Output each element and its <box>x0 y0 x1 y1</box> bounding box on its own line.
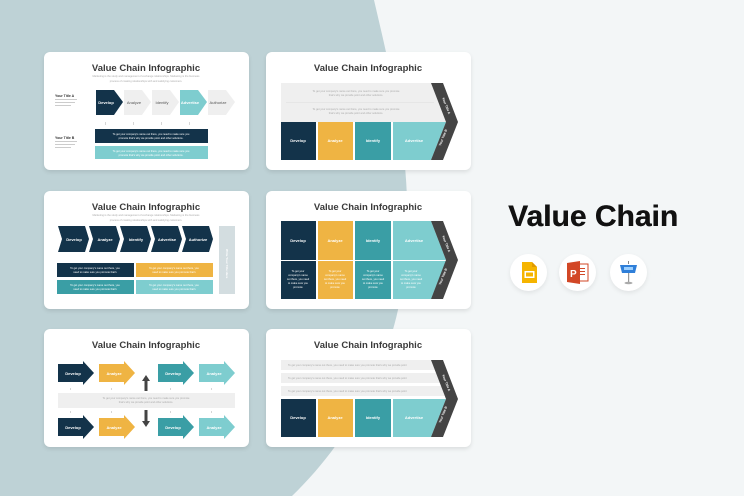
slide 2: value chain grid with two text rows: that's why we provide point and other solutions. <box>329 93 383 97</box>
slide 4: value chain grid two rows: company's name <box>288 273 308 277</box>
slide 1: chevron process with titles: Authorize <box>210 100 227 105</box>
slide 4: value chain grid two rows: company's name <box>325 273 345 277</box>
slide 1: chevron process with titles: Analyze <box>127 100 142 105</box>
slide 3: five chevrons with boxes: Marketing is the study and management of exchange relationships. Marketing is the business <box>93 213 200 217</box>
slide 5: arrows up and down: Develop <box>65 425 81 430</box>
slide 5: arrows up and down: Analyze <box>106 425 122 430</box>
slide 4: value chain grid two rows: out there, you need <box>287 277 310 281</box>
slide 4: value chain grid two rows: Develop <box>290 238 306 243</box>
icon: powerpoint <box>559 254 596 291</box>
slide 3: five chevrons with boxes: Write Your Title Here <box>225 249 229 279</box>
slide 2: value chain grid with two text rows: Analyze <box>327 138 343 143</box>
slide 4: value chain grid two rows: Advertise <box>405 238 424 243</box>
heading: Value Chain: Value Chain <box>508 200 678 233</box>
slide 4: value chain grid two rows: to make sure you <box>401 281 421 285</box>
slide 4: value chain grid two rows: out there, you need <box>400 277 423 281</box>
slide 5: arrows up and down: Analyze <box>206 425 222 430</box>
slide 4: value chain grid two rows: company's name <box>401 273 421 277</box>
slide 4: value chain grid two rows: out there, you need <box>324 277 347 281</box>
slide 6: value chain with three text rows: Develop <box>290 415 306 420</box>
slide 3: five chevrons with boxes: Authorize <box>189 237 208 242</box>
slide 1: chevron process with titles: Value Chain Infographic <box>92 63 200 74</box>
slide 4: value chain grid two rows <box>266 191 471 309</box>
slide 4: value chain grid two rows: To get your <box>329 269 342 273</box>
slide 1: chevron process with titles: Develop <box>98 100 114 105</box>
slide 4: value chain grid two rows: to make sure you <box>363 281 383 285</box>
slide 2: value chain grid with two text rows: To get your company's name out there, you need to make sure you promote <box>312 89 400 93</box>
slide 4: value chain grid two rows: promote <box>368 285 378 289</box>
icon: google slides <box>510 254 547 291</box>
slide 5: arrows up and down: Value Chain Infographic <box>92 340 200 351</box>
slide 3: five chevrons with boxes: To get your company's name out there, you <box>70 266 120 270</box>
slide 3: five chevrons with boxes: need to make sure you promote that's <box>152 270 196 274</box>
slide 2: value chain grid with two text rows: To get your company's name out there, you need to make sure you promote <box>312 107 400 111</box>
slide 2: value chain grid with two text rows <box>266 52 471 170</box>
icon: powerpoint: P <box>570 269 577 280</box>
slide 3: five chevrons with boxes: Advertise <box>158 237 177 242</box>
slide 5: arrows up and down: Develop <box>165 371 181 376</box>
slide 3: five chevrons with boxes <box>44 191 249 309</box>
slide 3: five chevrons with boxes: Develop <box>66 237 82 242</box>
slide 6: value chain with three text rows: To get your company's name out there, you need to make sure you promote that's why we provide point <box>288 389 407 393</box>
slide 2: value chain grid with two text rows: that's why we provide point and other solutions. <box>329 111 383 115</box>
slide 1: chevron process with titles <box>44 52 249 170</box>
slide 1: chevron process with titles: To get your company's name out there, you need to make sure you <box>113 132 190 136</box>
slide 1: chevron process with titles: To get your company's name out there, you need to make sure you <box>113 149 190 153</box>
slide 4: value chain grid two rows: Analyze <box>327 238 343 243</box>
slide 1: chevron process with titles: promote that's why we provide point and other solutions. <box>119 136 184 140</box>
slide 3: five chevrons with boxes: need to make sure you promote that's <box>73 287 117 291</box>
slide 5: arrows up and down: Analyze <box>206 371 222 376</box>
icon: keynote <box>610 254 647 291</box>
slide 4: value chain grid two rows: To get your <box>405 269 418 273</box>
slide 4: value chain grid two rows: Your Title B <box>438 267 448 286</box>
slide 2: value chain grid with two text rows: Your Title B <box>438 128 448 147</box>
slide 3: five chevrons with boxes: To get your company's name out there, you <box>149 266 199 270</box>
slide 4: value chain grid two rows: company's name <box>363 273 383 277</box>
slide 6: value chain with three text rows: To get your company's name out there, you need to make sure you promote that's why we provide point <box>288 363 407 367</box>
slide 6: value chain with three text rows: Identify <box>366 415 381 420</box>
slide 6: value chain with three text rows: To get your company's name out there, you need to make sure you promote that's why we provide point <box>288 376 407 380</box>
slide 5: arrows up and down <box>44 329 249 447</box>
slide 1: chevron process with titles: Marketing is the study and management of exchange relationships. Marketing is the business <box>93 74 200 78</box>
slide 1: chevron process with titles: Your Title A <box>55 94 75 98</box>
slide 1: chevron process with titles: Advertise <box>181 100 200 105</box>
slide 5: arrows up and down: that's why we provide point and other solutions. <box>119 400 173 404</box>
slide 1: chevron process with titles: Identify <box>156 100 168 105</box>
slide 2: value chain grid with two text rows: Identify <box>366 138 381 143</box>
slide 4: value chain grid two rows: promote <box>330 285 340 289</box>
slide 6: value chain with three text rows: Advertise <box>405 415 424 420</box>
slide 3: five chevrons with boxes: need to make sure you promote that's <box>73 270 117 274</box>
slide 4: value chain grid two rows: To get your <box>292 269 305 273</box>
slide 2: value chain grid with two text rows: Advertise <box>405 138 424 143</box>
slide 3: five chevrons with boxes: Identify <box>129 237 144 242</box>
slide 1: chevron process with titles: Your Title B <box>55 136 75 140</box>
slide 1: chevron process with titles: process of creating relationships with and satisfying customers. <box>110 79 183 83</box>
slide 4: value chain grid two rows: Value Chain Infographic <box>314 202 422 213</box>
slide 4: value chain grid two rows: to make sure you <box>288 281 308 285</box>
slide 4: value chain grid two rows: promote <box>293 285 303 289</box>
slide 2: value chain grid with two text rows: Develop <box>290 138 306 143</box>
slide 1: chevron process with titles: promote that's why we provide point and other solutions. <box>119 153 184 157</box>
slide 4: value chain grid two rows: to make sure you <box>325 281 345 285</box>
slide 4: value chain grid two rows: promote <box>406 285 416 289</box>
slide 6: value chain with three text rows <box>266 329 471 447</box>
slide 3: five chevrons with boxes: process of creating relationships with and satisfying customers. <box>110 218 183 222</box>
slide 3: five chevrons with boxes: need to make sure you promote that's <box>152 287 196 291</box>
slide 6: value chain with three text rows: Value Chain Infographic <box>314 340 422 351</box>
slide 5: arrows up and down: Develop <box>65 371 81 376</box>
slide 2: value chain grid with two text rows: Your Title A <box>441 97 452 115</box>
slide 4: value chain grid two rows: To get your <box>367 269 380 273</box>
slide 4: value chain grid two rows: out there, you need <box>362 277 385 281</box>
slide 3: five chevrons with boxes: To get your company's name out there, you <box>149 283 199 287</box>
slide 3: five chevrons with boxes: To get your company's name out there, you <box>70 283 120 287</box>
slide 5: arrows up and down: Analyze <box>106 371 122 376</box>
slide 4: value chain grid two rows: Your Title A <box>441 235 452 253</box>
slide 3: five chevrons with boxes: Analyze <box>97 237 113 242</box>
slide 5: arrows up and down: To get your company's name out there, you need to make sure you promote <box>102 396 190 400</box>
slide 3: five chevrons with boxes: Value Chain Infographic <box>92 202 200 213</box>
slide 4: value chain grid two rows: Identify <box>366 238 381 243</box>
slide 2: value chain grid with two text rows: Value Chain Infographic <box>314 63 422 74</box>
slide 6: value chain with three text rows: Your Title B <box>438 405 448 424</box>
slide 5: arrows up and down: Develop <box>165 425 181 430</box>
slide 6: value chain with three text rows: Your Title A <box>441 374 452 392</box>
slide 6: value chain with three text rows: Analyze <box>327 415 343 420</box>
